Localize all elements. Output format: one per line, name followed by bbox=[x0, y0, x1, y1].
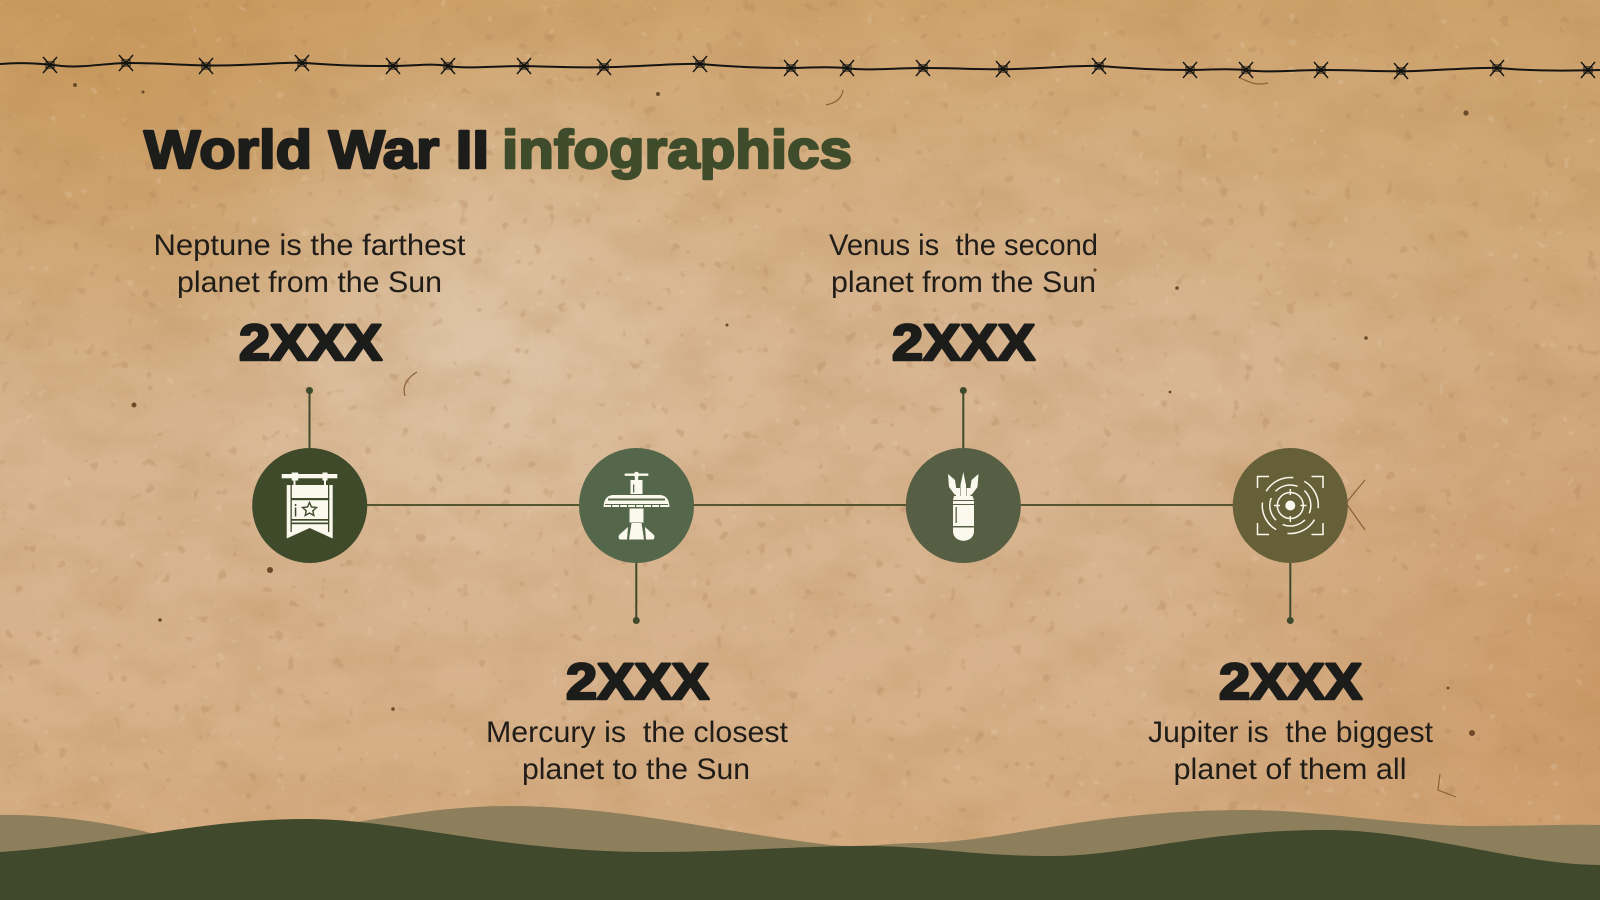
Mercury stem bbox=[633, 563, 640, 624]
timeline connector line bbox=[367, 504, 1233, 506]
icon: target bbox=[1233, 448, 1348, 563]
icon: bomb bbox=[906, 448, 1021, 563]
Neptune year: 2XXX bbox=[239, 314, 382, 371]
title bbox=[144, 120, 852, 180]
Mercury year: 2XXX bbox=[566, 653, 709, 710]
Venus description: planet from the Sun bbox=[831, 266, 1096, 299]
Neptune description: planet from the Sun bbox=[177, 266, 442, 299]
Mercury description: planet to the Sun bbox=[522, 753, 750, 786]
Venus description: Venus is the second bbox=[829, 229, 1098, 262]
Jupiter year: 2XXX bbox=[1219, 653, 1362, 710]
icon: war banner bbox=[252, 448, 367, 563]
Venus stem bbox=[960, 387, 967, 448]
milestone 4: Jupiter bbox=[1148, 448, 1434, 786]
Venus description bbox=[829, 229, 1098, 299]
Jupiter description: Jupiter is the biggest bbox=[1148, 716, 1434, 749]
Neptune description: Neptune is the farthest bbox=[154, 229, 466, 262]
Neptune stem bbox=[306, 387, 313, 448]
Mercury description: Mercury is the closest bbox=[486, 716, 789, 749]
title: World War II bbox=[144, 120, 489, 180]
hills bbox=[0, 806, 1600, 900]
Jupiter stem bbox=[1287, 563, 1294, 624]
icon: airplane bbox=[579, 448, 694, 563]
Jupiter description: planet of them all bbox=[1174, 753, 1406, 786]
barbed wire bbox=[0, 55, 1600, 79]
milestone 1: Neptune bbox=[154, 229, 466, 563]
milestone 3: Venus bbox=[829, 229, 1098, 563]
Mercury description bbox=[486, 716, 789, 786]
title: infographics bbox=[502, 120, 852, 180]
Jupiter description bbox=[1148, 716, 1434, 786]
Venus year: 2XXX bbox=[892, 314, 1035, 371]
back hills bbox=[0, 806, 1600, 900]
Neptune description bbox=[154, 229, 466, 299]
milestone 2: Mercury bbox=[486, 448, 789, 786]
front hill bbox=[0, 819, 1600, 900]
